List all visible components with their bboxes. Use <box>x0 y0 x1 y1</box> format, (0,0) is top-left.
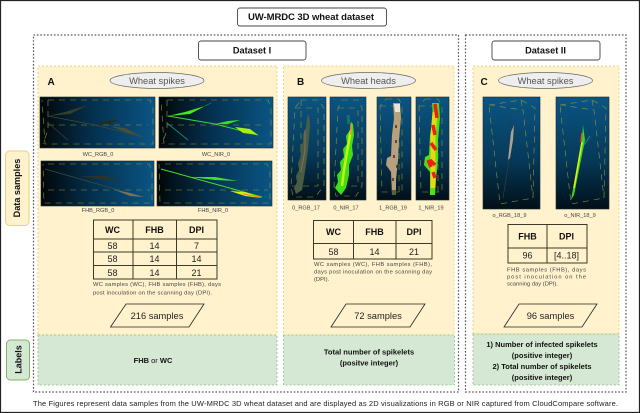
image: 0_RGB_17 <box>288 97 326 200</box>
table: WC, FHB, DPI: 58 <box>328 247 339 257</box>
table: WC, FHB, DPI: 58 <box>107 254 118 264</box>
table: FHB, DPI: 96 <box>522 250 533 260</box>
label: FHB_NIR_0: FHB_NIR_0 <box>198 208 228 214</box>
table caption B: (DPI). <box>314 277 330 283</box>
pill: Wheat spikes: Wheat spikes <box>129 76 185 86</box>
panel letter C: C <box>480 77 488 88</box>
table: FHB, DPI: FHB <box>518 232 537 242</box>
table: WC, FHB, DPI: 21 <box>409 247 419 257</box>
panel letter B: B <box>297 77 304 88</box>
heading: Dataset II <box>492 41 600 60</box>
label: 1_NIR_19: 1_NIR_19 <box>418 206 444 212</box>
panel A labels <box>38 335 277 385</box>
label: 1_RGB_19: 1_RGB_19 <box>379 206 407 212</box>
pill: Wheat spikes: Wheat spikes <box>518 76 574 86</box>
table caption C <box>507 268 586 288</box>
table: WC, FHB, DPI: 14 <box>149 241 160 251</box>
table: WC, FHB, DPI: DPI <box>406 227 422 237</box>
image: o_NIR_18_9 <box>556 97 609 209</box>
pill: Wheat spikes <box>498 72 592 88</box>
panel C labels: (positive integer) <box>512 373 573 382</box>
table caption A: WC samples (WC), FHB samples (FHB), days <box>93 282 221 288</box>
title: UW-MRDC 3D wheat dataset <box>248 12 375 23</box>
panel B: wheat heads data samples <box>284 66 454 335</box>
table: WC, FHB, DPI: FHB <box>145 225 164 235</box>
table: WC, FHB, DPI: 58 <box>107 241 118 251</box>
table: WC, FHB, DPI <box>314 220 432 259</box>
table: WC, FHB, DPI: 14 <box>149 268 160 278</box>
table caption C: scanning day (DPI). <box>507 282 558 288</box>
table: WC, FHB, DPI: 7 <box>194 241 199 251</box>
footer note: The Figures represent data samples from the UW-MRDC 3D wheat dataset and are displayed as 2D visualizations in RGB or NIR captured from CloudCompare software. <box>33 399 618 408</box>
pill: Wheat heads <box>322 72 416 88</box>
heading: Dataset I: Dataset I <box>233 46 271 56</box>
table caption C: FHB samples (FHB), days <box>507 268 586 274</box>
panel letter A: A <box>48 77 55 88</box>
table: WC, FHB, DPI: FHB <box>365 227 384 237</box>
sample count: 216 samples <box>110 304 204 327</box>
label: 0_NIR_17: 0_NIR_17 <box>333 206 359 212</box>
image: 1_RGB_19 <box>377 97 411 200</box>
side label: Labels: Labels <box>14 345 24 374</box>
heading: Dataset II: Dataset II <box>525 46 566 56</box>
panel C labels: 1) Number of infected spikelets <box>486 340 598 349</box>
panel B labels: (positve integer) <box>340 358 399 368</box>
table: WC, FHB, DPI <box>94 220 217 279</box>
table caption A <box>93 282 221 296</box>
table: FHB, DPI: DPI <box>559 232 574 242</box>
table: FHB, DPI <box>508 224 587 263</box>
side label: Data samples: Data samples <box>12 159 22 217</box>
image: FHB_NIR_0 <box>157 161 272 206</box>
table: WC, FHB, DPI: 14 <box>369 247 380 257</box>
table: WC, FHB, DPI: WC <box>326 227 341 237</box>
label: o_NIR_18_9: o_NIR_18_9 <box>564 213 596 219</box>
table: WC, FHB, DPI: 14 <box>149 254 160 264</box>
table: WC, FHB, DPI: WC <box>105 225 120 235</box>
image: WC_RGB_0 <box>40 97 155 148</box>
sample count: 96 samples: 96 samples <box>527 311 575 321</box>
label: o_RGB_18_9: o_RGB_18_9 <box>493 213 526 219</box>
heading: Dataset I <box>198 41 306 60</box>
label: WC_RGB_0: WC_RGB_0 <box>83 152 113 158</box>
panel B labels <box>284 335 454 385</box>
table: FHB, DPI: [4..18] <box>554 250 579 260</box>
dataset II frame <box>466 35 626 392</box>
label: WC_NIR_0: WC_NIR_0 <box>202 152 230 158</box>
panel C labels: 2) Total number of spikelets <box>492 362 592 371</box>
panel B labels: Total number of spikelets <box>324 348 414 356</box>
table caption A: post inoculation on the scanning day (DPI). <box>93 290 212 296</box>
sample count: 72 samples <box>331 304 425 327</box>
image: 1_NIR_19 <box>416 97 449 200</box>
panel C labels <box>473 334 619 385</box>
label: FHB_RGB_0: FHB_RGB_0 <box>82 208 114 214</box>
table: WC, FHB, DPI: 58 <box>107 268 118 278</box>
panel A labels: FHB or WC <box>134 356 173 365</box>
sample count: 216 samples: 216 samples <box>131 311 184 321</box>
panel A: wheat spikes data samples <box>38 66 277 335</box>
label: 0_RGB_17: 0_RGB_17 <box>292 206 320 212</box>
side label: Data samples <box>6 151 29 226</box>
sample count: 72 samples: 72 samples <box>354 311 402 321</box>
table: WC, FHB, DPI: 21 <box>191 268 202 278</box>
title <box>238 8 386 26</box>
table caption B: WC samples (WC), FHB samples (FHB), <box>314 262 432 268</box>
image: WC_NIR_0 <box>159 97 273 148</box>
dataset I frame <box>34 35 458 392</box>
pill: Wheat spikes <box>110 72 204 88</box>
image: 0_NIR_17 <box>330 97 366 200</box>
panel C labels: (positive integer) <box>512 351 573 360</box>
sample count: 96 samples <box>504 304 597 327</box>
image: o_RGB_18_9 <box>483 97 540 209</box>
pill: Wheat heads: Wheat heads <box>341 76 396 86</box>
side label: Labels <box>6 340 30 380</box>
table caption B <box>314 262 432 283</box>
table: WC, FHB, DPI: DPI <box>189 225 204 235</box>
table: WC, FHB, DPI: 14 <box>191 254 202 264</box>
table caption B: days post inoculation on the scanning day <box>314 270 432 276</box>
image: FHB_RGB_0 <box>41 161 154 206</box>
table caption C: post inoculation on the <box>507 274 586 280</box>
panel C: wheat spikes data samples <box>473 66 619 334</box>
